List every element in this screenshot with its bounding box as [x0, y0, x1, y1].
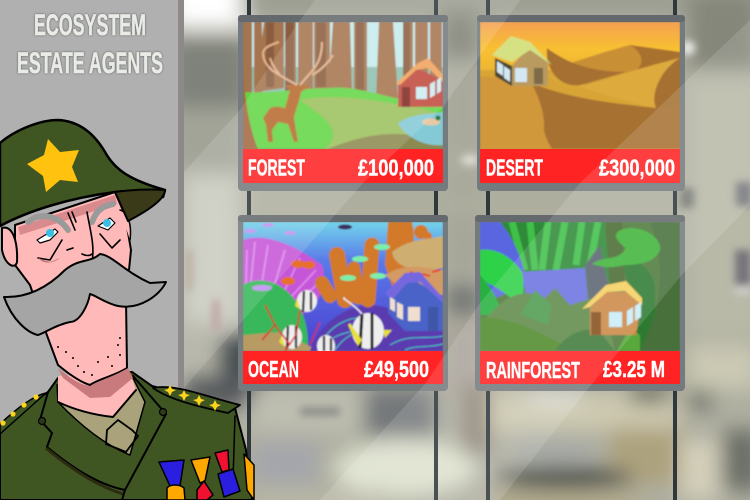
rainforest price bar: RAINFOREST	[486, 357, 580, 383]
listing: forest	[238, 15, 448, 191]
forest house	[396, 58, 443, 107]
forest price bar: FOREST	[248, 154, 305, 180]
agency wall panel	[0, 0, 184, 500]
desert price bar	[480, 149, 680, 183]
helmet	[0, 120, 165, 226]
agency name: ECOSYSTEM	[34, 9, 146, 42]
listing: rainforest	[475, 215, 685, 391]
ocean house	[385, 272, 443, 331]
listing: desert	[477, 15, 685, 191]
glass reflections	[184, 0, 750, 500]
deer	[263, 42, 333, 142]
blurred shop interior background	[170, 0, 750, 500]
ocean price bar: OCEAN	[248, 356, 299, 382]
hanging wires	[247, 0, 677, 500]
desert price bar: £300,000	[599, 154, 675, 180]
eyes	[37, 218, 115, 243]
general character	[0, 120, 254, 500]
shirt	[57, 378, 145, 455]
desert house	[492, 36, 552, 86]
agency name: ESTATE AGENTS	[17, 47, 163, 80]
jacket	[0, 372, 254, 500]
angel fish	[279, 290, 392, 357]
epaulettes	[0, 385, 240, 434]
face and neck	[2, 192, 133, 398]
forest price bar: £100,000	[358, 154, 434, 180]
coral and small fish	[244, 223, 390, 351]
listing: ocean	[238, 215, 448, 391]
forest picture	[243, 22, 443, 149]
stubble	[57, 337, 121, 376]
desert price bar: DESERT	[486, 154, 543, 180]
desert picture	[480, 22, 680, 150]
ocean price bar: £49,500	[364, 356, 429, 382]
ocean price bar	[243, 351, 443, 384]
rainforest house	[582, 281, 642, 335]
rainforest price bar: £3.25 M	[603, 356, 665, 382]
ocean picture	[243, 222, 443, 357]
rainforest picture	[480, 222, 680, 351]
moustache	[4, 254, 166, 335]
eyebrows	[28, 204, 113, 230]
medals	[159, 450, 254, 500]
agency name	[17, 9, 163, 80]
helmet star	[27, 139, 79, 192]
forest price bar	[243, 149, 443, 183]
facial lines	[38, 212, 120, 262]
rainforest price bar	[480, 351, 680, 384]
